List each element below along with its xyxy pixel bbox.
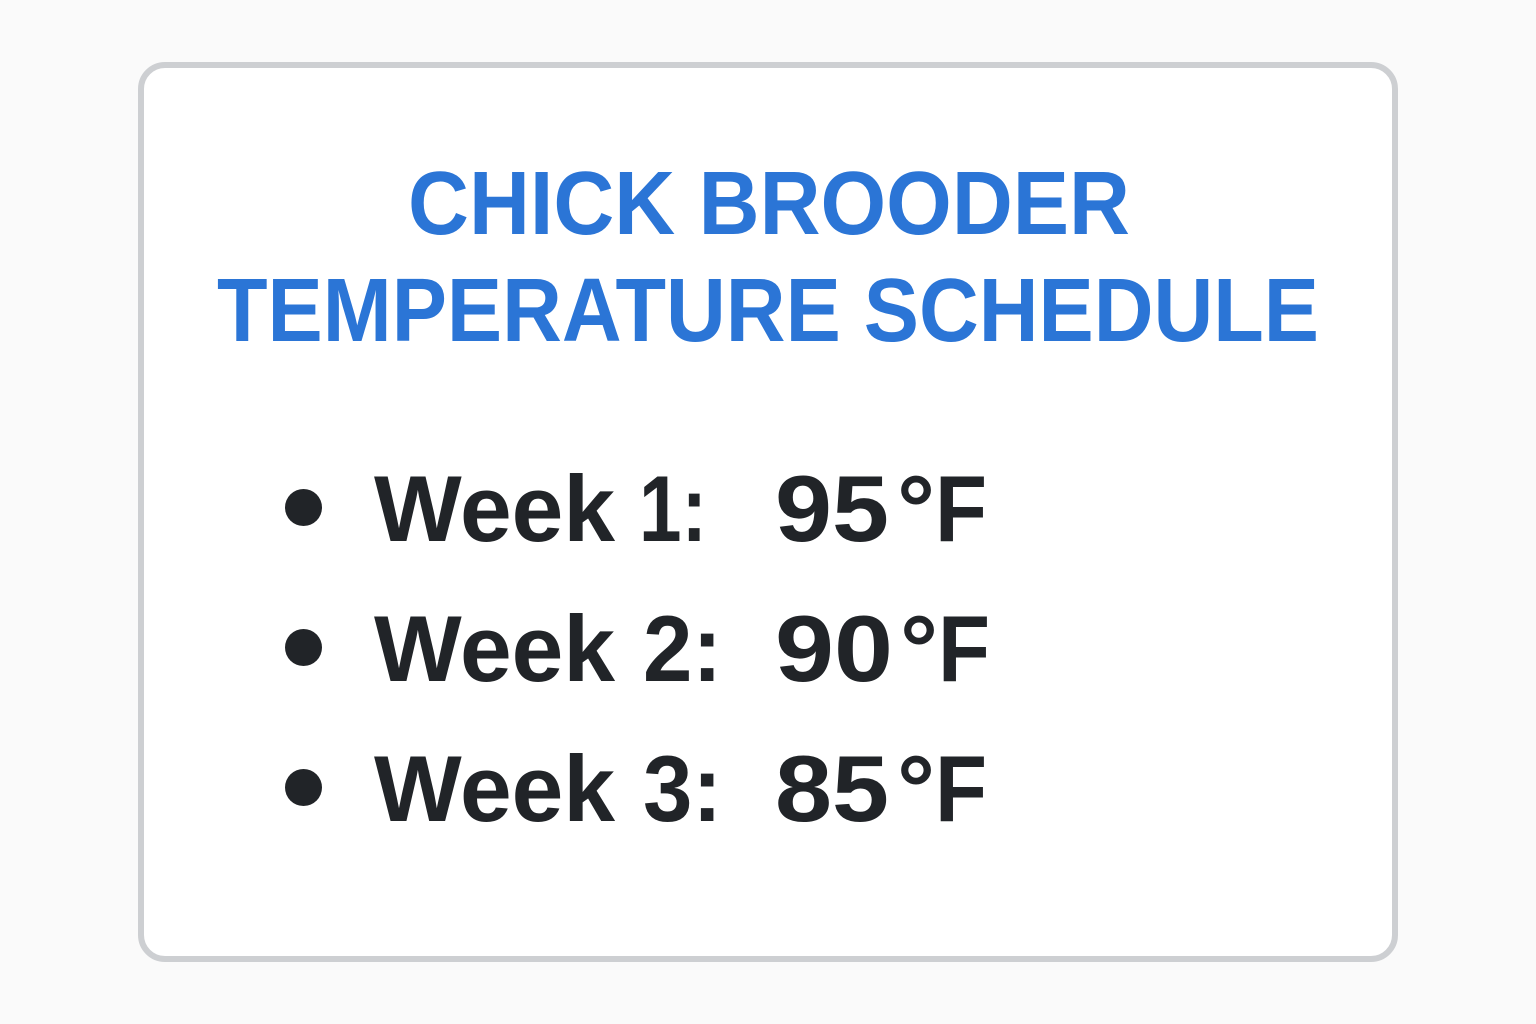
list item: week 2: ° [900, 596, 938, 701]
schedule list [285, 456, 990, 841]
panel: schedule card [141, 65, 1395, 959]
list item: week 1: F [935, 456, 987, 561]
list item: week 3: ° [897, 736, 935, 841]
list item: week 3: F [935, 736, 987, 841]
list item: week 1: ° [897, 456, 935, 561]
title: TEMPERATURE SCHEDULE [217, 261, 1319, 361]
list item: week 2: F [938, 596, 990, 701]
list item: week 2: Week [374, 596, 616, 701]
list item: week 3 [285, 736, 987, 841]
list item: week 1 [285, 456, 987, 561]
list item: week 1: 1: [639, 456, 707, 561]
list item: week 3: 85 [775, 736, 889, 841]
list item: week 3: 3: [643, 736, 722, 841]
list item: week 1: Week [374, 456, 616, 561]
title [217, 154, 1319, 361]
title: CHICK BROODER [408, 154, 1130, 254]
list item: week 2: 2: [643, 596, 722, 701]
list item: week 3: Week [374, 736, 616, 841]
list item: week 1: 95 [775, 456, 889, 561]
list item: week 2 [285, 596, 990, 701]
list item: week 2: 90 [775, 596, 893, 701]
